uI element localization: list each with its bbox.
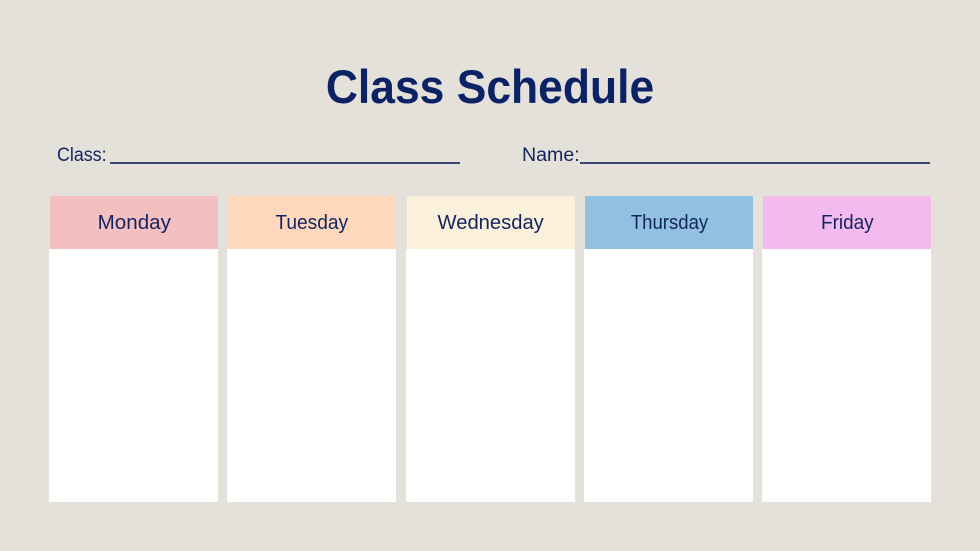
Wednesday column	[406, 249, 575, 502]
panel: Friday	[762, 196, 931, 502]
Monday column	[49, 249, 218, 502]
Friday header: Friday	[821, 212, 873, 234]
Tuesday header: Tuesday	[276, 212, 348, 234]
Monday header: Monday	[97, 212, 171, 234]
panel: Thursday	[584, 196, 753, 502]
Tuesday header	[228, 196, 396, 249]
panel: Monday	[49, 196, 218, 502]
Tuesday column	[227, 249, 396, 502]
panel: Tuesday	[227, 196, 396, 502]
Wednesday header	[407, 196, 575, 249]
class label: Class:	[57, 144, 107, 166]
Thursday header	[585, 196, 753, 249]
class underline	[110, 162, 460, 164]
name underline	[580, 162, 930, 164]
panel: Wednesday	[406, 196, 575, 502]
Wednesday header: Wednesday	[438, 212, 544, 234]
Thursday column	[584, 249, 753, 502]
Friday column	[762, 249, 931, 502]
title: Class Schedule	[326, 60, 654, 113]
Thursday header: Thursday	[630, 212, 708, 234]
Monday header	[50, 196, 218, 249]
name label: Name:	[522, 144, 580, 166]
Friday header	[763, 196, 931, 249]
